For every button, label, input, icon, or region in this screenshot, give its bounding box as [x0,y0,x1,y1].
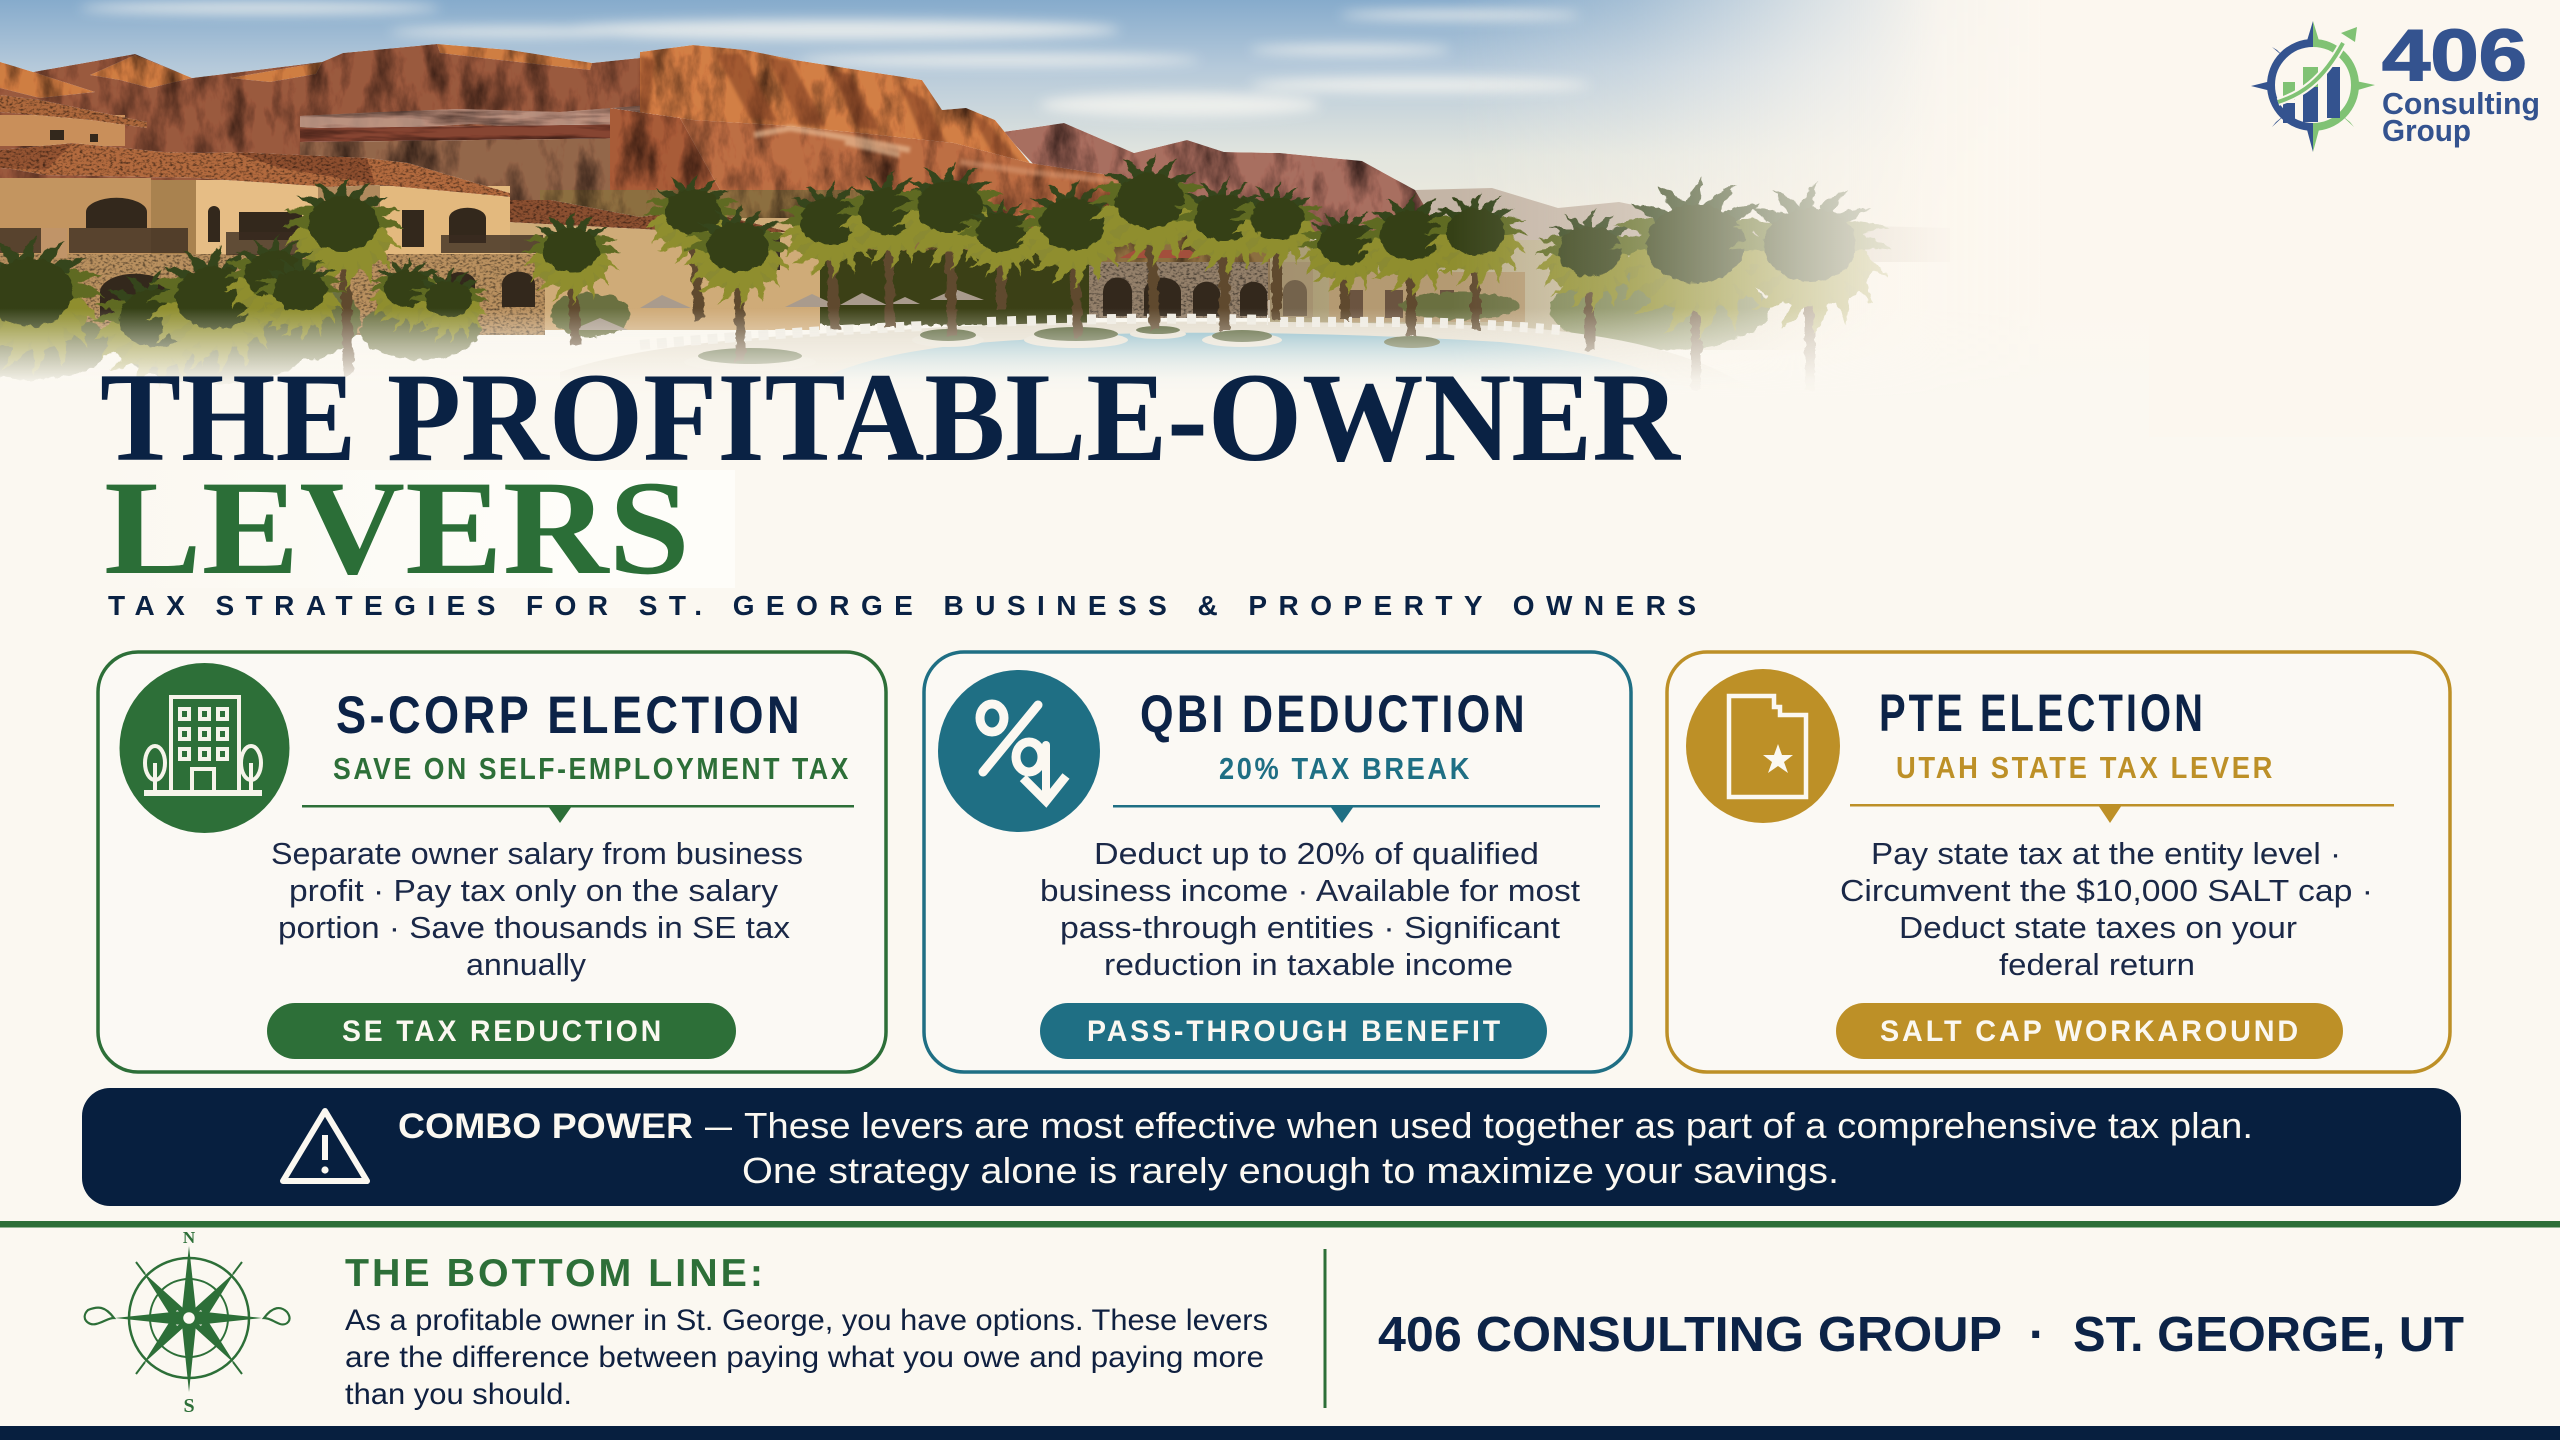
pale ledges [754,128,910,155]
logo wordmark [2382,16,2540,148]
sunlit lower slope [610,108,1240,238]
callout text [398,1105,2253,1191]
callout text: COMBO POWER [398,1107,693,1146]
callout text: These levers are most effective when used together as part of a comprehensive tax plan. [744,1105,2253,1146]
icon: warning triangle [283,1111,367,1181]
foliage mass [800,250,1095,325]
description: Separate owner salary from business [271,836,803,871]
shaded left ridge [0,44,660,210]
description: annually [466,947,587,982]
umbrellas [572,289,984,330]
pill badge: SALT CAP WORKAROUND [1880,1015,2301,1048]
roofs [0,95,510,197]
bottom line body: As a profitable owner in St. George, you have options. These levers [345,1304,1268,1337]
logo wordmark: 406 [2382,16,2527,96]
main mesa cliffs [0,44,1300,300]
villa windows and arches [50,130,535,317]
logo compass emblem [2251,21,2375,152]
heading: QBI DEDUCTION [1140,685,1528,744]
description: portion · Save thousands in SE tax [278,910,791,945]
description: Circumvent the $10,000 SALT cap · [1840,873,2373,908]
icon: percent with down arrow [938,670,1100,832]
icon: compass rose: S [183,1395,195,1417]
icon: office building [120,663,290,833]
description: pass-through entities · Significant [1060,910,1560,945]
title line one: THE PROFITABLE-OWNER [100,348,1681,488]
description: Deduct up to 20% of qualified [1094,836,1539,871]
heading: S-CORP ELECTION [336,686,803,745]
pale strata band [300,105,650,130]
bottom line body: are the difference between paying what you owe and paying more [345,1341,1264,1374]
description: Pay state tax at the entity level · [1871,836,2341,871]
description: federal return [1999,947,2195,982]
bottom line text [345,1252,1268,1411]
divider pointer [1850,804,2394,823]
pill badge: SE TAX REDUCTION [342,1015,664,1048]
main villa walls [0,115,545,335]
footer divider [1324,1249,1326,1408]
title [100,348,1681,603]
description: business income · Available for most [1040,873,1580,908]
subheading: UTAH STATE TAX LEVER [1896,750,2275,785]
logo wordmark: Consulting [2382,86,2540,121]
pill badge [267,1003,736,1059]
pool water [800,333,1700,395]
callout: combo power [82,1088,2461,1206]
icon: Utah with star [1686,669,1840,823]
footer brand line: · [2029,1308,2045,1362]
resort land haze [1270,240,1910,350]
shadowed chimneys [640,54,1020,162]
description [1040,836,1580,982]
distant mountains [1003,123,1950,262]
title line two: LEVERS [104,454,690,603]
sky with clouds [0,0,2200,260]
foothill ground [540,190,1300,300]
description: Deduct state taxes on your [1899,910,2297,945]
bottom line body [345,1304,1268,1411]
panel: PTE election [1667,652,2450,1072]
footer brand line: ST. GEORGE, UT [2073,1308,2464,1362]
bottom line body: than you should. [345,1378,572,1411]
green footer rule [0,1221,2560,1228]
divider pointer [302,805,854,823]
right wing [506,200,1525,330]
subtitle: TAX STRATEGIES FOR ST. GEORGE BUSINESS & PROPERTY OWNERS [108,590,1696,621]
logo: 406 Consulting Group [2251,16,2540,152]
divider pointer [1113,805,1600,823]
callout text: — [705,1105,732,1146]
callout text: One strategy alone is rarely enough to maximize your savings. [742,1150,1839,1191]
bottom line heading: THE BOTTOM LINE: [345,1252,766,1295]
bottom navy bar [0,1426,2560,1440]
sunlit ridge tops [0,44,592,98]
description: profit · Pay tax only on the salary [289,873,779,908]
hero photo: desert resort and red cliffs [0,0,2560,437]
description [1840,836,2373,982]
footer brand line: 406 CONSULTING GROUP [1378,1308,2002,1362]
pill badge [1836,1003,2343,1059]
panel: QBI deduction [924,652,1631,1072]
pill badge: PASS-THROUGH BENEFIT [1087,1015,1503,1048]
logo wordmark: Group [2382,113,2471,148]
resort buildings [0,95,1525,335]
subheading: 20% TAX BREAK [1219,751,1472,786]
description [271,836,803,982]
description: reduction in taxable income [1104,947,1513,982]
panel: S-Corp election [98,652,886,1072]
footer brand line [1378,1308,2464,1362]
pool deck [560,322,1760,395]
icon: compass rose [85,1228,289,1417]
vegetation band [0,270,1770,384]
pill badge [1040,1003,1547,1059]
pool islands [684,326,1440,371]
balconies [0,228,543,255]
sunlit mesa face [640,45,1030,163]
subheading: SAVE ON SELF-EMPLOYMENT TAX [333,751,851,786]
icon: compass rose: N [183,1228,196,1247]
mist fades [0,0,2560,437]
palm trees [0,153,1893,390]
lounge chairs [640,319,1560,345]
heading: PTE ELECTION [1879,684,2206,743]
